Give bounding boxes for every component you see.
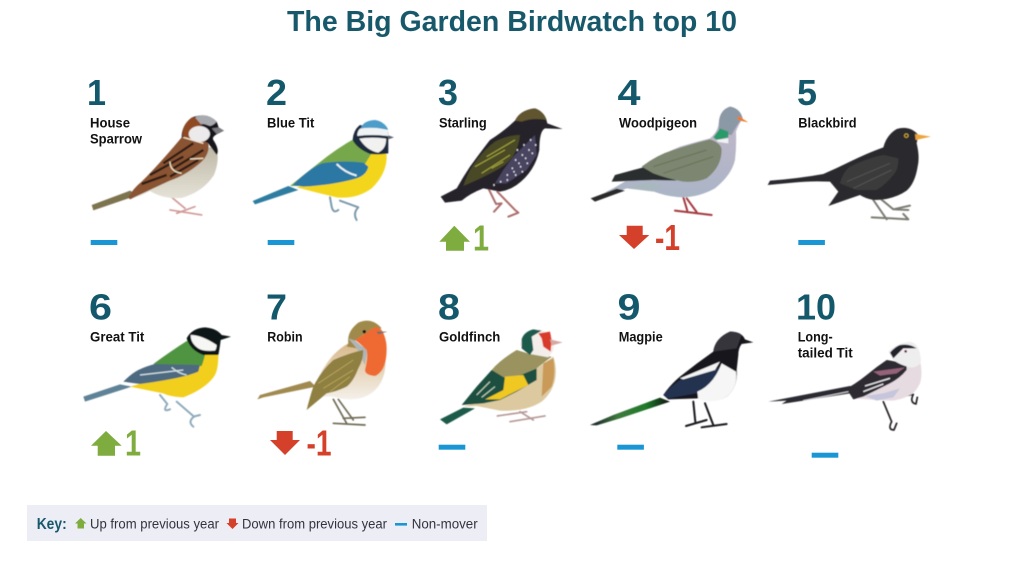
rank number 10: 10 [796, 286, 836, 327]
panel: rank 5 Blackbird [768, 72, 931, 245]
bird name: tailed Tit [798, 346, 853, 361]
key item: non-mover: Non-mover [412, 516, 478, 532]
bird name: Blackbird [798, 116, 857, 131]
icon: magpie [590, 332, 753, 427]
icon: up arrow [75, 518, 86, 528]
icon: up arrow [91, 431, 122, 456]
bird name: House [90, 116, 130, 131]
rank number 4: 4 [618, 72, 640, 113]
bird name: Great Tit [90, 330, 145, 345]
bird name: Woodpigeon [619, 116, 697, 131]
panel: rank 8 Goldfinch [438, 286, 563, 450]
trend: non-mover [617, 445, 644, 450]
trend: down 1 [270, 423, 332, 464]
icon: starling [441, 108, 563, 217]
rank number 2: 2 [266, 72, 287, 113]
panel: rank 2 Blue Tit [253, 72, 394, 245]
bird name [798, 330, 853, 361]
rank number 8: 8 [438, 286, 460, 327]
icon: goldfinch [440, 329, 563, 424]
bird name: Magpie [619, 330, 663, 345]
change value: -1 [306, 423, 332, 464]
key background [27, 505, 487, 541]
rank number 9: 9 [618, 286, 640, 327]
panel: rank 3 Starling [438, 72, 563, 259]
panel: key [27, 505, 487, 541]
icon: down arrow [226, 518, 238, 529]
change value: -1 [655, 217, 680, 258]
rank number 3: 3 [438, 72, 458, 113]
trend: up 1 [91, 423, 141, 464]
bird name: Robin [267, 330, 303, 345]
trend: down 1 [619, 217, 680, 258]
rank number 6: 6 [89, 286, 112, 327]
icon: down arrow [619, 226, 649, 249]
bird name: Sparrow [90, 131, 142, 146]
icon: robin [257, 321, 387, 425]
rank number 1: 1 [87, 72, 106, 113]
icon: up arrow [439, 226, 470, 251]
bird name: Goldfinch [439, 330, 500, 345]
icon: woodpigeon [591, 107, 748, 215]
trend: non-mover [812, 453, 838, 458]
icon: blue tit [253, 120, 394, 220]
icon: great tit [83, 327, 231, 427]
change value: 1 [473, 218, 489, 259]
key item: up: Up from previous year [90, 516, 219, 532]
icon: non-mover dash [395, 523, 407, 526]
bird name [90, 116, 142, 146]
trend: non-mover [439, 445, 465, 450]
icon: blackbird [768, 128, 931, 219]
bird name: Long- [798, 330, 833, 345]
trend: up 1 [439, 218, 489, 259]
trend: non-mover [798, 240, 825, 245]
icon: long-tailed tit [768, 342, 922, 430]
rank number 5: 5 [797, 72, 817, 113]
panel: rank 1 House Sparrow [87, 72, 224, 245]
trend: non-mover [91, 240, 117, 245]
icon: down arrow [270, 431, 300, 455]
title: The Big Garden Birdwatch top 10 [287, 6, 737, 38]
key item: down: Down from previous year [242, 516, 387, 532]
panel: rank 4 Woodpigeon [591, 72, 748, 258]
panel: rank 10 Long-tailed Tit [768, 286, 922, 458]
icon: house sparrow [92, 115, 224, 215]
rank number 7: 7 [266, 286, 287, 327]
key heading: Key: [37, 516, 67, 533]
bird name: Starling [439, 116, 487, 131]
panel: rank 9 Magpie [590, 286, 753, 450]
trend: non-mover [268, 240, 294, 245]
change value: 1 [125, 423, 141, 464]
panel: rank 7 Robin [257, 286, 387, 464]
bird name: Blue Tit [267, 116, 315, 131]
panel: rank 6 Great Tit [83, 286, 231, 464]
